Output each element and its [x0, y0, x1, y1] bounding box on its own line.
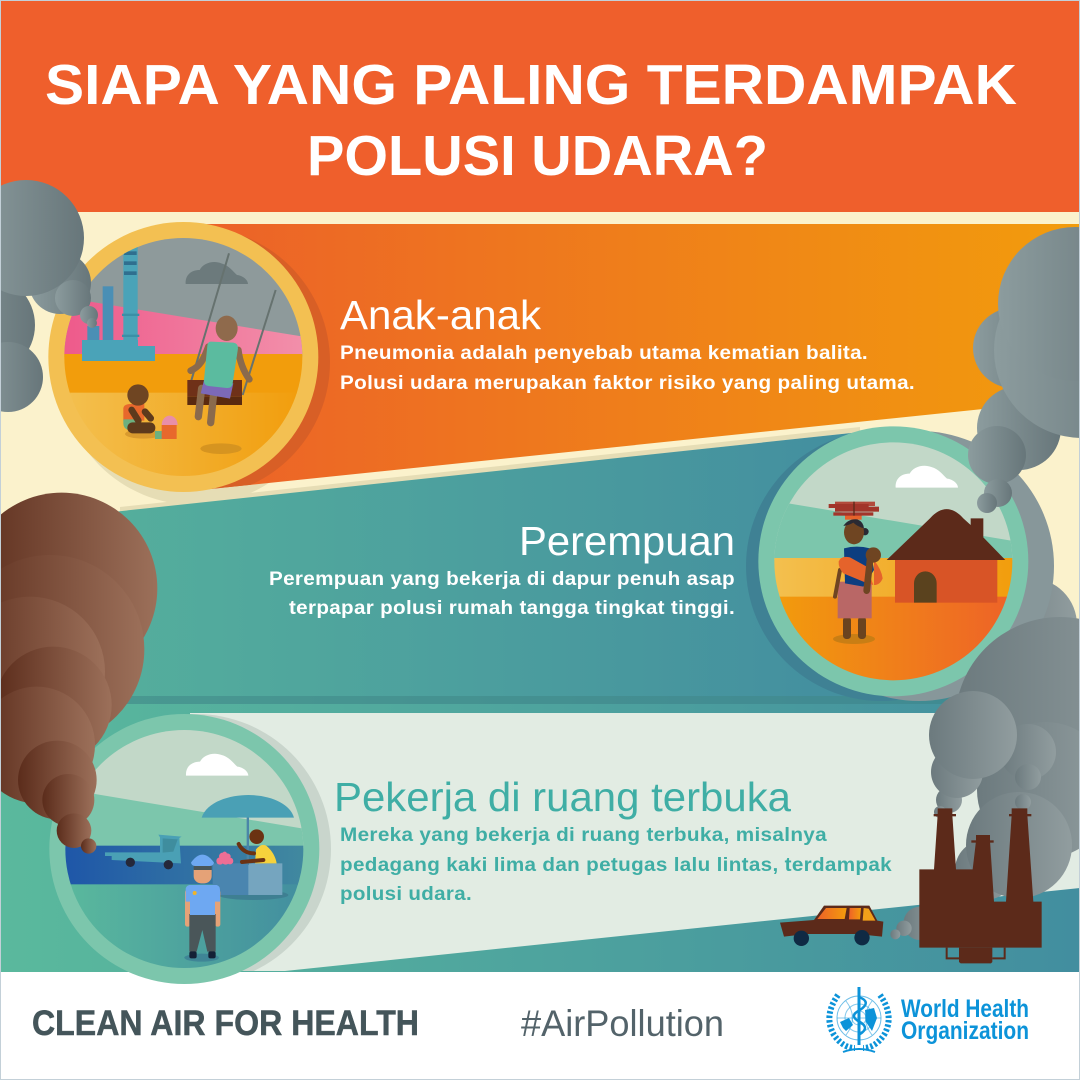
text: children: Anak-anak [340, 292, 542, 338]
text: women: terpapar polusi rumah tangga tingkat tinggi. [289, 597, 735, 619]
children circle drop shadow on cream [60, 235, 330, 505]
title [45, 53, 1017, 188]
icon: white cloud [896, 466, 958, 488]
smoke: top left [0, 180, 98, 412]
icon: white cloud [186, 754, 248, 776]
panel: teal band women [118, 432, 951, 704]
text: women [269, 518, 735, 619]
smoke: factory plume [929, 617, 1080, 900]
text: outdoor workers: pedagang kaki lima dan petugas lalu lintas, terdampak [340, 854, 892, 876]
smoke: right upper [968, 227, 1080, 513]
swing shadow [200, 443, 242, 454]
text: WHO name: World Health [901, 995, 1029, 1023]
circle illustration: outdoor workers [49, 714, 319, 984]
title: SIAPA YANG PALING TERDAMPAK [45, 53, 1017, 117]
footer: campaign name: CLEAN AIR FOR HEALTH [32, 1004, 419, 1043]
text: children [340, 292, 915, 394]
header banner [0, 0, 1080, 212]
factory silhouette [919, 808, 1042, 963]
text: outdoor workers: polusi udara. [340, 883, 472, 905]
text: WHO name [901, 995, 1029, 1045]
icon: factory and car [780, 808, 1042, 963]
cream background [0, 212, 1080, 712]
band shadow [120, 427, 860, 512]
footer: hashtag: #AirPollution [521, 1003, 724, 1044]
circle illustration: children [48, 222, 318, 492]
car [780, 906, 883, 946]
circle illustration: women [758, 426, 1028, 696]
icon: truck [105, 835, 182, 869]
text: children: Pneumonia adalah penyebab utama kematian balita. [340, 342, 868, 364]
text: outdoor workers [334, 774, 892, 905]
logo: WHO [829, 987, 1029, 1052]
lower band backdrop [0, 704, 1080, 972]
icon: vendor stall [202, 795, 294, 900]
icon: traffic police officer [184, 855, 220, 962]
text: outdoor workers: Pekerja di ruang terbuka [334, 774, 791, 820]
icon: house [887, 509, 1005, 603]
icon: child on swing [187, 253, 276, 423]
smoke: brown plume [0, 493, 157, 854]
icon: factory [82, 246, 155, 361]
title: POLUSI UDARA? [307, 124, 768, 188]
icon: grey cloud [186, 262, 248, 284]
icon: woman carrying baby and bricks [829, 502, 883, 644]
icon: WHO emblem [829, 987, 889, 1052]
icon: sitting child with blocks [123, 384, 178, 439]
panel: orange band children [206, 224, 1079, 489]
text: outdoor workers: Mereka yang bekerja di ruang terbuka, misalnya [340, 824, 827, 846]
text: WHO name: Organization [901, 1017, 1029, 1045]
text: children: Polusi udara merupakan faktor risiko yang paling utama. [340, 372, 915, 394]
smoke behind women circle [784, 431, 1077, 701]
text: women: Perempuan [519, 518, 735, 564]
text: women: Perempuan yang bekerja di dapur penuh asap [269, 568, 735, 590]
panel: light band outdoor workers [190, 713, 1079, 971]
